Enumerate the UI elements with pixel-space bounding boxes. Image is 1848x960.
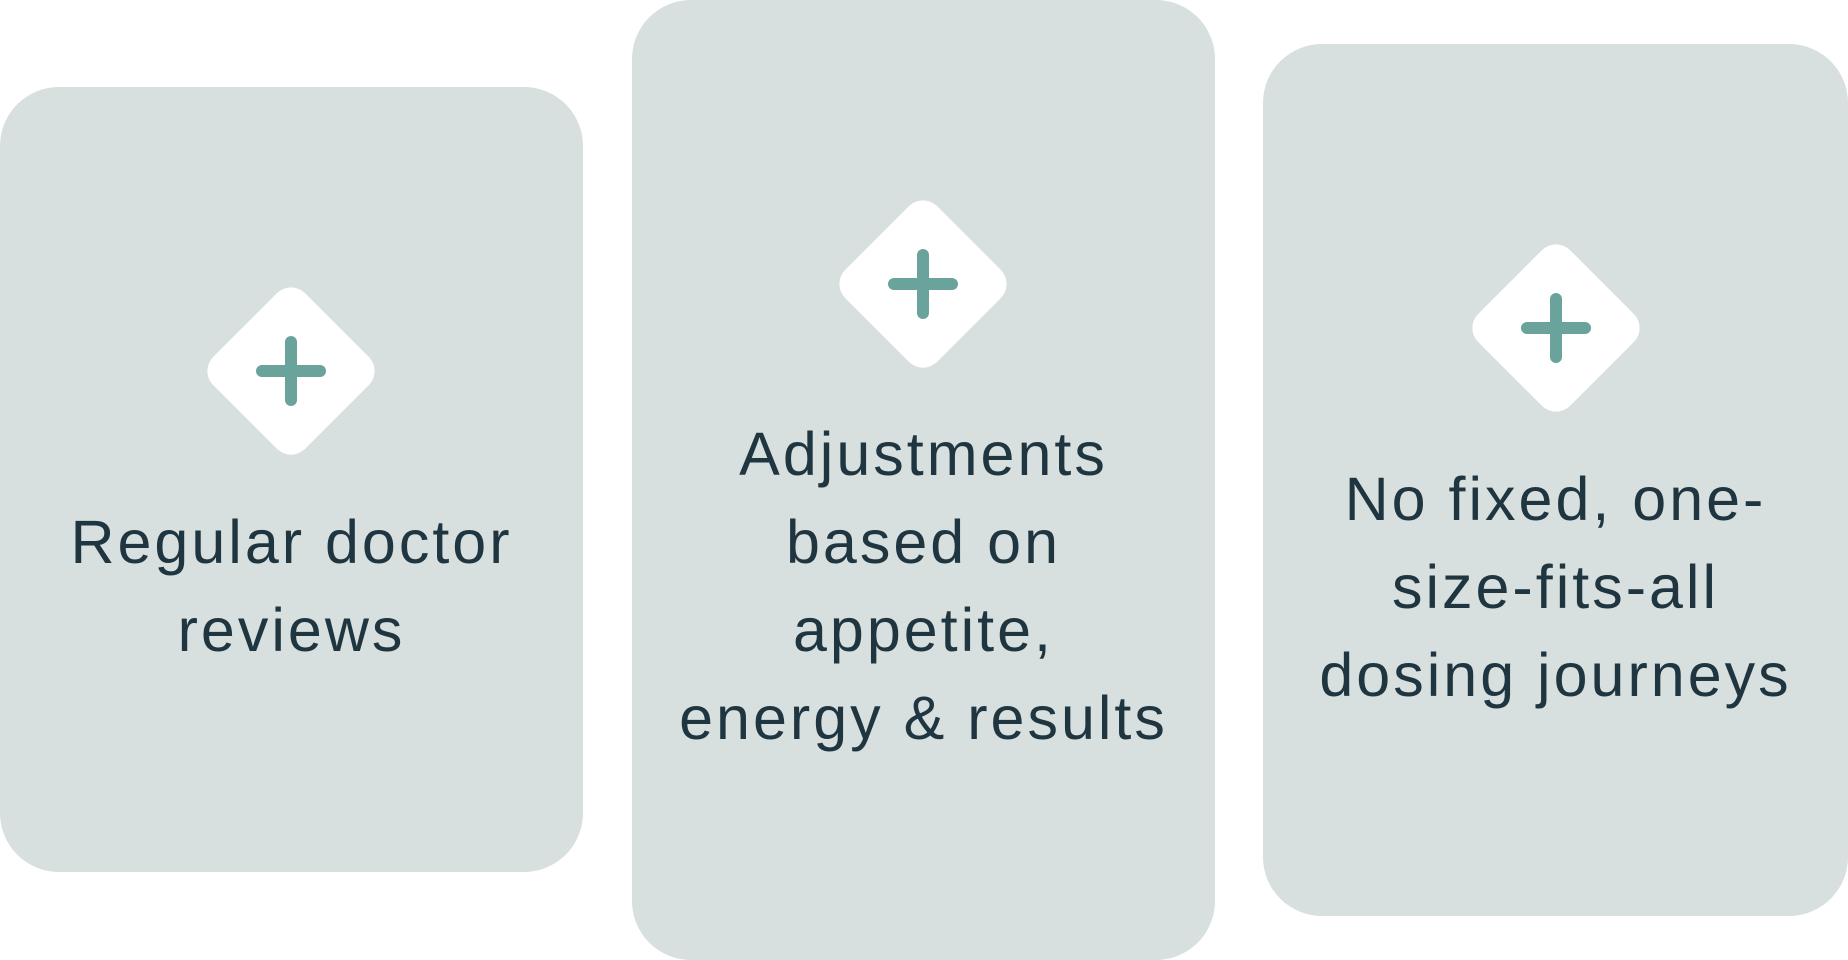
icon: plus diamond 2 [839, 200, 1006, 368]
text: regular doctor reviews [70, 508, 513, 664]
text: no fixed dosing: No fixed, one- [1345, 465, 1766, 533]
text: adjustments: based on [786, 508, 1061, 576]
panel: card 2 [632, 0, 1215, 960]
text: no fixed dosing: size-fits-all [1392, 553, 1719, 621]
icon: plus diamond 3 [1472, 244, 1640, 412]
text: adjustments: appetite, [793, 596, 1054, 664]
panel: card 3 [1263, 44, 1848, 916]
text: no fixed dosing [1319, 465, 1792, 709]
text: adjustments: energy & results [679, 684, 1168, 752]
text: regular doctor reviews: reviews [178, 596, 405, 664]
text: adjustments [679, 420, 1168, 752]
text: regular doctor reviews: Regular doctor [70, 508, 513, 576]
icon: plus diamond 1 [207, 288, 375, 455]
text: no fixed dosing: dosing journeys [1319, 641, 1792, 709]
text: adjustments: Adjustments [739, 420, 1108, 488]
panel: card 1 [0, 87, 583, 872]
